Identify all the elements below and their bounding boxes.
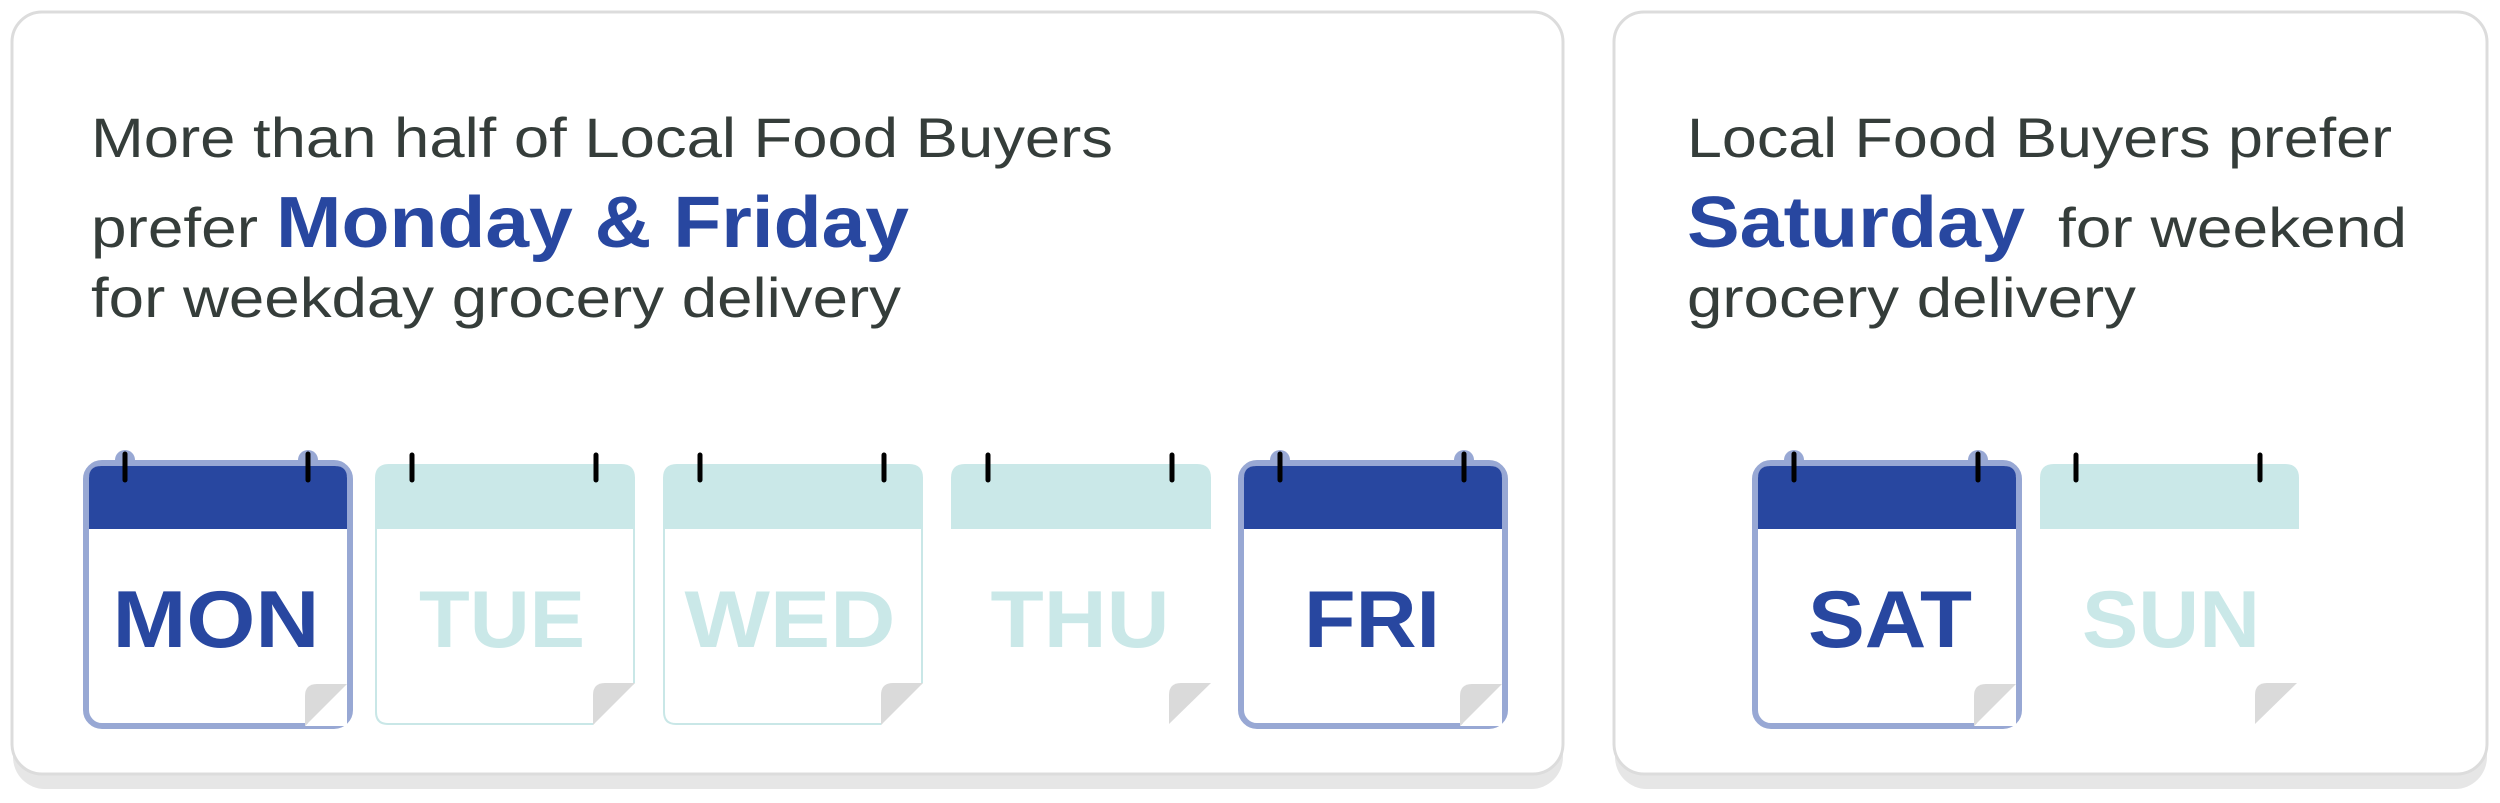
heading: weekend: Local Food Buyers prefer [1687,106,2392,169]
heading: weekday [91,106,1113,329]
panel: weekday [12,12,1563,789]
calendar: FRI: FRI [1304,575,1440,665]
heading: weekday: prefer [91,196,258,259]
calendar: SAT [1755,450,2019,726]
heading: weekend [1687,106,2407,329]
calendar: SUN: SUN [2082,575,2260,665]
calendar: THU: THU [990,575,1170,665]
calendar: THU [951,455,1211,724]
panel: weekend [1614,12,2487,789]
heading: weekend: Saturday [1687,183,2025,263]
heading: weekday: Monday & Friday [276,183,909,263]
calendar: FRI [1241,450,1505,726]
calendar: MON [86,450,350,726]
heading: weekday: for weekday grocery delivery [91,266,901,329]
calendar: WED [663,455,923,725]
heading: weekday: More than half of Local Food Buyers [91,106,1113,169]
calendar: TUE: TUE [419,575,585,665]
calendar: MON: MON [112,575,320,665]
heading: weekend: for weekend [2058,196,2407,259]
calendar: TUE [375,455,635,725]
calendar: WED: WED [684,575,896,665]
calendar: SUN [2040,455,2299,724]
heading: weekend: grocery delivery [1687,266,2136,329]
calendar: SAT: SAT [1808,575,1972,665]
